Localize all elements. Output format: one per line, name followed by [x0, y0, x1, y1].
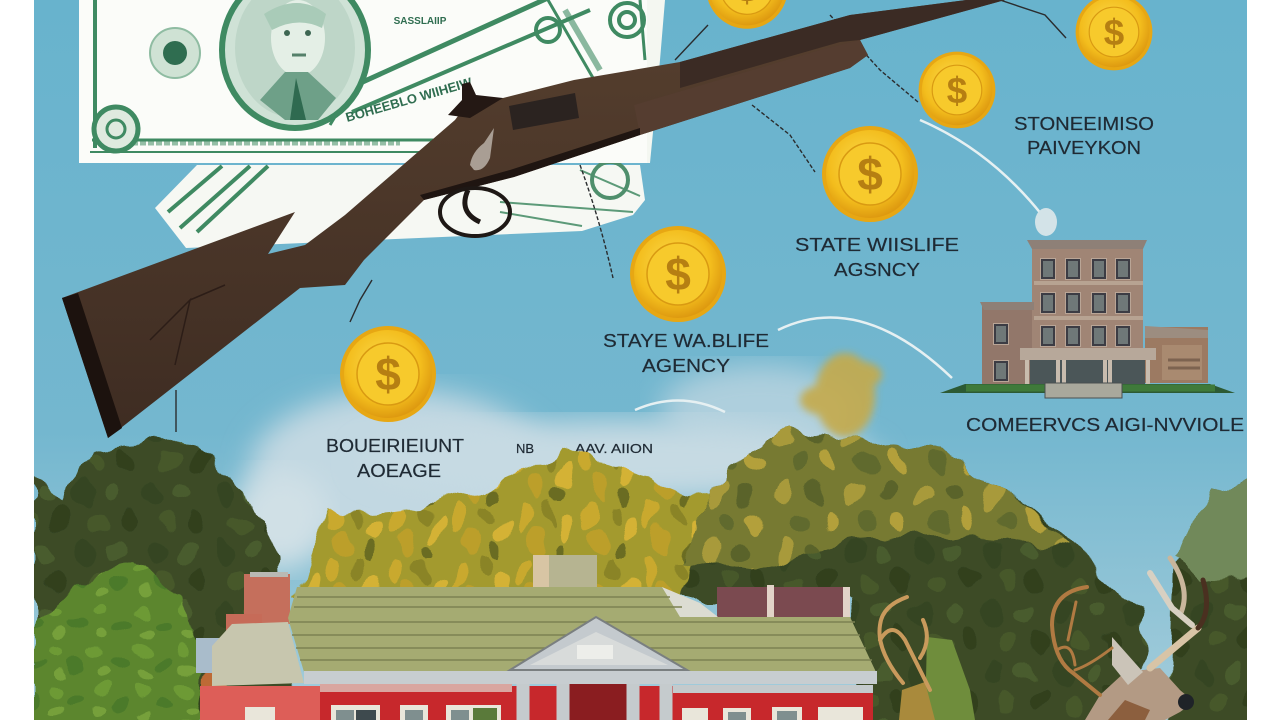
illustration: dollar bills — [79, 0, 665, 248]
upper right bill — [540, 0, 665, 163]
label: state wildlife agency 1: AGSNCY — [834, 260, 920, 280]
label: state wildlife agency 1 — [795, 235, 959, 280]
main roof — [288, 587, 876, 672]
main bill — [79, 0, 647, 163]
label: stone pavilion — [1014, 114, 1154, 158]
small bill lettering: SASSLAIIP — [394, 16, 447, 27]
rifle hammer — [448, 82, 503, 118]
left wing roof — [196, 622, 304, 686]
house portico — [510, 617, 687, 720]
bill lettering: BOHEEBLO WIIHEIW — [344, 74, 474, 125]
left brick chimney — [226, 572, 290, 640]
rifle bolt — [509, 93, 579, 130]
label: small caption — [516, 441, 653, 456]
label: conservation: COMEERVCS AIGI-NVVIOLE — [966, 415, 1244, 435]
label: state wildlife agency 1: STATE WIISLIFE — [795, 235, 959, 255]
icon: coin 6 — [706, 0, 788, 29]
illustration: rifle — [62, 0, 1005, 438]
portrait medallion — [222, 0, 368, 128]
icon: coin 1 — [340, 326, 436, 422]
white swoosh arrows — [635, 120, 1042, 412]
trigger guard — [440, 188, 510, 236]
scroll ornaments — [536, 3, 644, 70]
icon: coin 4 — [919, 52, 995, 128]
label: small caption: AAV. AIION — [575, 441, 653, 456]
rifle teardrop plate — [470, 128, 494, 170]
yellow foliage splash — [800, 353, 882, 437]
label: stone pavilion: PAIVEYKON — [1027, 138, 1141, 158]
illustration: deer 2 — [1052, 558, 1207, 720]
label: recipient acreage: AOEAGE — [357, 461, 441, 481]
illustration: tree line — [34, 430, 1260, 720]
icon: coin 2 — [630, 226, 726, 322]
label: small caption: NB — [516, 441, 534, 456]
label: state wildlife agency 2: STAYE WA.BLIFE — [603, 331, 769, 351]
bill seal — [150, 28, 200, 78]
house windows — [245, 705, 863, 720]
illustration: house — [196, 555, 877, 720]
label: state wildlife agency 2: AGENCY — [642, 356, 730, 376]
illustration: deer 1 — [879, 597, 975, 720]
icon: coin 5 — [1076, 0, 1152, 70]
house chimney — [533, 555, 597, 588]
label: stone pavilion: STONEEIMISO — [1014, 114, 1154, 134]
label: recipient acreage: BOUEIRIEIUNT — [326, 436, 464, 456]
corner seal — [94, 107, 138, 151]
icon: coin 3 — [822, 126, 918, 222]
lower bills — [155, 162, 645, 248]
dashed connectors — [176, 0, 1066, 432]
illustration: agency building — [940, 240, 1235, 398]
icon: small white cloud — [1035, 208, 1057, 236]
purple chimney — [717, 585, 850, 617]
label: state wildlife agency 2 — [603, 331, 769, 376]
label: recipient acreage — [326, 436, 464, 481]
